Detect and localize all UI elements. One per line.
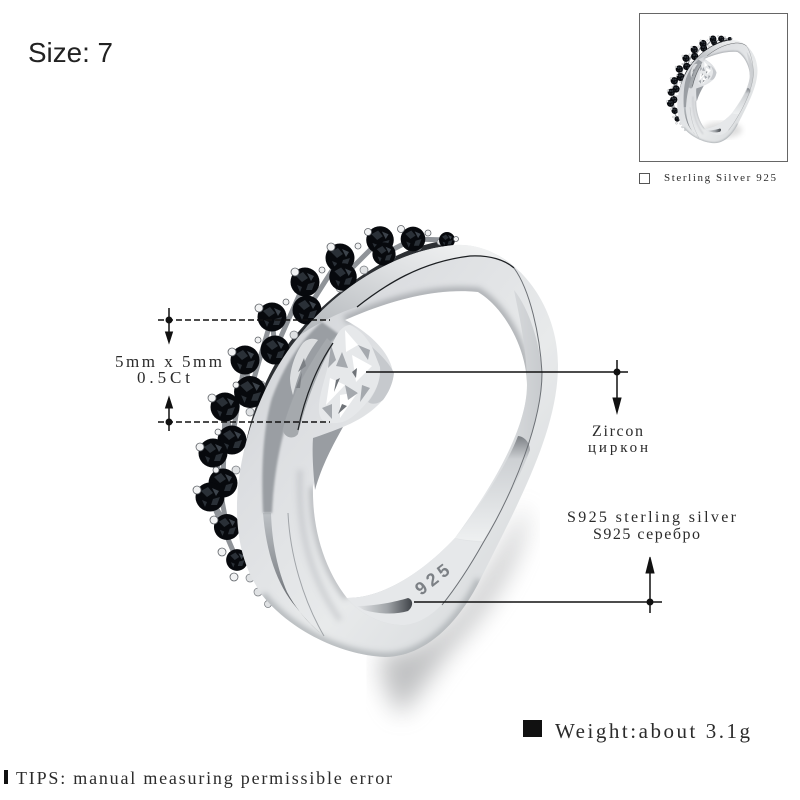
silver leader arrow (414, 557, 662, 613)
dimension: top guide (158, 308, 330, 343)
dimension label: 5mm x 5mm (115, 352, 222, 371)
zircon label (588, 423, 648, 456)
silver label: S925 sterling silver (567, 509, 737, 526)
dimension label (115, 352, 222, 387)
stamp 925: 925 (411, 558, 457, 599)
size heading: Size: 7 (28, 37, 113, 68)
zircon label: циркон (588, 440, 648, 456)
tips note: TIPS: manual measuring permissible error (16, 768, 392, 788)
main ring illustration (193, 226, 558, 657)
weight legend: Weight:about 3.1g (555, 719, 750, 743)
silver label: S925 серебро (593, 526, 700, 543)
thumbnail panel (640, 14, 788, 162)
zircon label: Zircon (592, 423, 643, 440)
ring drop shadow (381, 505, 525, 715)
silver label (567, 509, 737, 543)
dimension: bottom guide (158, 397, 330, 431)
dimension label: 0.5Ct (137, 368, 190, 387)
thumbnail caption: Sterling Silver 925 (664, 172, 776, 184)
zircon leader arrow (366, 360, 628, 413)
